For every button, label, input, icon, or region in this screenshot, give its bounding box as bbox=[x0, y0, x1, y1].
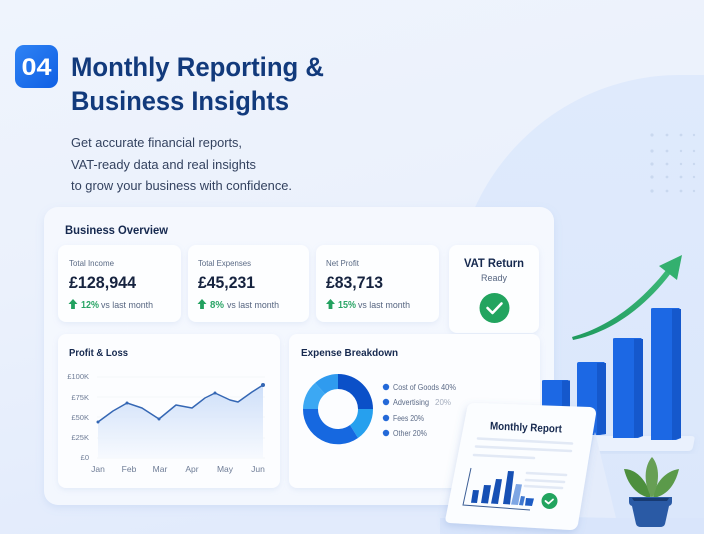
intro text bbox=[71, 135, 292, 193]
card: total income: Total Income bbox=[69, 258, 114, 268]
icon: green check bbox=[480, 293, 510, 323]
card: total income bbox=[58, 245, 181, 322]
line chart: £25K bbox=[71, 433, 89, 442]
step number badge bbox=[15, 45, 58, 88]
card: total income: 12% bbox=[81, 300, 99, 311]
line chart: Mar bbox=[153, 464, 167, 474]
title: Business Insights bbox=[71, 86, 289, 116]
icon: report check bbox=[542, 493, 558, 509]
intro text: to grow your business with confidence. bbox=[71, 178, 292, 193]
line chart: £0 bbox=[81, 453, 89, 462]
card: total expenses: 8% bbox=[210, 300, 224, 311]
intro text: Get accurate financial reports, bbox=[71, 135, 242, 150]
text lines bbox=[474, 438, 572, 488]
card: net profit: 15% bbox=[338, 300, 356, 311]
panel: expense breakdown: Expense Breakdown bbox=[301, 347, 398, 359]
card: net profit: Net Profit bbox=[326, 258, 360, 268]
card: VAT return bbox=[449, 245, 539, 333]
pot bbox=[629, 497, 672, 527]
card: net profit bbox=[316, 245, 439, 322]
monthly report document bbox=[446, 403, 616, 530]
document title: Monthly Report bbox=[490, 420, 562, 436]
legend: Advertising bbox=[393, 397, 429, 407]
card: total income: vs last month bbox=[101, 300, 153, 311]
card: total income: £128,944 bbox=[69, 273, 137, 292]
legend: Other 20% bbox=[393, 428, 427, 438]
legend: Fees 20% bbox=[393, 413, 424, 423]
3D bar chart on shelf bbox=[542, 308, 695, 451]
line chart bbox=[67, 372, 265, 474]
document stand bbox=[577, 432, 616, 518]
growth arrow bbox=[572, 255, 682, 340]
card: total expenses bbox=[188, 245, 309, 322]
heading: business overview: Business Overview bbox=[65, 223, 169, 237]
line chart: £100K bbox=[67, 372, 89, 381]
card: VAT return: VAT Return bbox=[464, 256, 524, 270]
line chart: Apr bbox=[185, 464, 199, 474]
panel: profit and loss bbox=[58, 334, 280, 488]
legend: 40% bbox=[441, 382, 456, 392]
decorative dot grid bbox=[650, 133, 695, 193]
title bbox=[71, 52, 324, 116]
mini bar chart bbox=[463, 468, 534, 510]
card: net profit: £83,713 bbox=[326, 273, 383, 292]
line chart: Feb bbox=[122, 464, 137, 474]
title: Monthly Reporting & bbox=[71, 52, 324, 82]
line chart: £50K bbox=[71, 413, 89, 422]
panel: expense breakdown bbox=[289, 334, 540, 488]
panel: business overview bbox=[44, 207, 554, 505]
legend: Cost of Goods bbox=[393, 382, 439, 392]
leaves bbox=[624, 457, 679, 498]
card: VAT return: Ready bbox=[481, 273, 507, 284]
line chart: Jun bbox=[251, 464, 265, 474]
legend bbox=[383, 382, 456, 438]
potted plant bbox=[624, 457, 679, 527]
legend: 20% bbox=[435, 397, 451, 407]
card: net profit: vs last month bbox=[358, 300, 410, 311]
line chart: £75K bbox=[71, 393, 89, 402]
intro text: VAT-ready data and real insights bbox=[71, 157, 256, 172]
card: total expenses: £45,231 bbox=[198, 273, 255, 292]
panel: profit and loss: Profit & Loss bbox=[69, 347, 128, 359]
line chart: May bbox=[217, 464, 234, 474]
donut chart bbox=[303, 374, 373, 444]
line chart: Jan bbox=[91, 464, 105, 474]
step number badge: 04 bbox=[22, 54, 52, 81]
card: total expenses: Total Expenses bbox=[198, 258, 251, 268]
card: total expenses: vs last month bbox=[227, 300, 279, 311]
